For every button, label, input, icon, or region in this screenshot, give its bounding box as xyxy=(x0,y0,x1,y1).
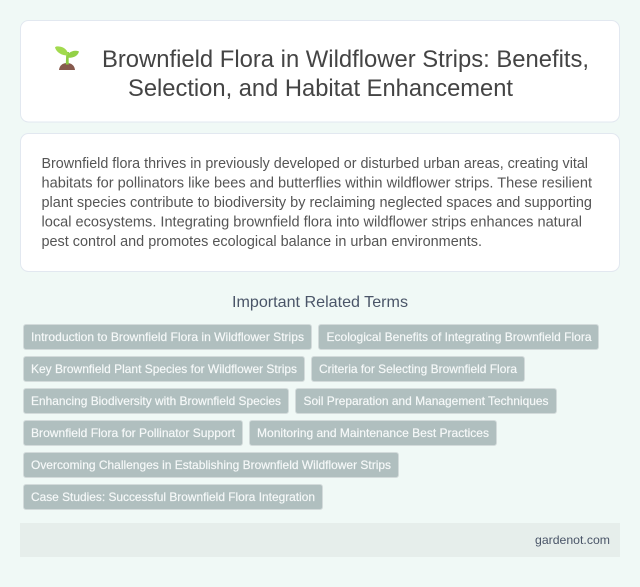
text block: description: pest control and promotes ecological balance in urban environments. xyxy=(42,234,482,250)
tag xyxy=(24,484,322,510)
tag xyxy=(24,324,312,350)
panel: description card xyxy=(20,134,620,272)
tag xyxy=(296,388,556,414)
tag xyxy=(24,452,398,478)
tag xyxy=(318,324,598,350)
tag: Brownfield Flora for Pollinator Support xyxy=(31,426,236,440)
title: Selection, and Habitat Enhancement xyxy=(128,75,513,102)
icon: sprout xyxy=(55,46,79,70)
tag list xyxy=(24,324,598,510)
text block: description xyxy=(42,156,592,250)
tag xyxy=(250,420,496,446)
tag xyxy=(312,356,524,382)
tag: Case Studies: Successful Brownfield Flora Integration xyxy=(31,490,315,504)
tag xyxy=(24,356,304,382)
text block: description: plant species contribute to biodiversity by reclaiming neglected spaces and supporting xyxy=(42,195,592,211)
tag: Monitoring and Maintenance Best Practices xyxy=(257,426,489,440)
tag: Ecological Benefits of Integrating Brownfield Flora xyxy=(326,330,592,344)
tag: Key Brownfield Plant Species for Wildflower Strips xyxy=(31,362,297,376)
tag: Introduction to Brownfield Flora in Wildflower Strips xyxy=(31,330,304,344)
text block: description: habitats for pollinators like bees and butterflies within wildflower strips. These resilient xyxy=(42,176,592,192)
text block: description: Brownfield flora thrives in previously developed or disturbed urban areas, creating vital xyxy=(42,156,588,172)
title xyxy=(102,46,589,102)
tag: Overcoming Challenges in Establishing Brownfield Wildflower Strips xyxy=(31,458,391,472)
text block: description: local ecosystems. Integrating brownfield flora into wildflower strips enhances natural xyxy=(42,214,582,230)
panel: header card xyxy=(20,20,620,122)
title: Brownfield Flora in Wildflower Strips: Benefits, xyxy=(102,46,589,73)
tag: Soil Preparation and Management Techniques xyxy=(304,394,548,408)
footer source text: gardenot.com xyxy=(535,533,610,547)
tag xyxy=(24,388,288,414)
tag xyxy=(24,420,242,446)
tag: Criteria for Selecting Brownfield Flora xyxy=(319,362,517,376)
footer bar xyxy=(20,523,620,557)
heading: related terms: Important Related Terms xyxy=(232,294,408,311)
tag: Enhancing Biodiversity with Brownfield Species xyxy=(31,394,281,408)
